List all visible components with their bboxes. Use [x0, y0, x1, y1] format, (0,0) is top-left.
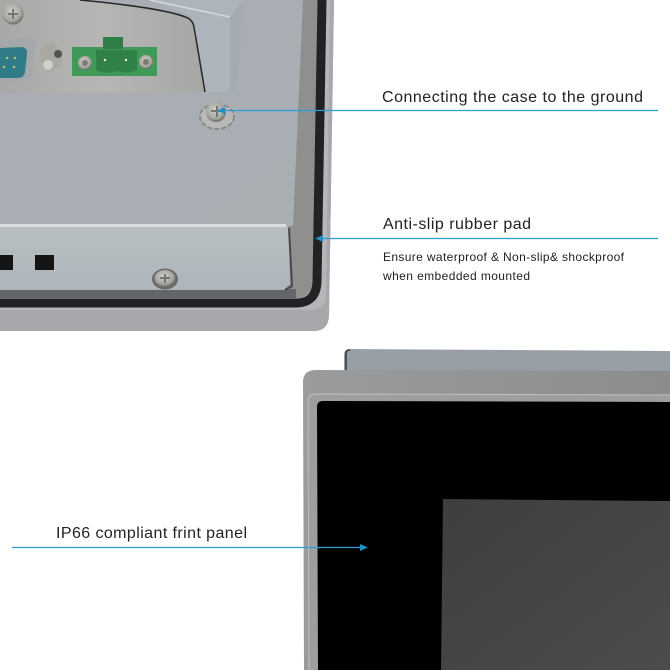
arrow: rubber pad	[315, 235, 658, 242]
callout: ground connection	[217, 89, 658, 114]
bezel inner groove	[308, 394, 670, 670]
top screw	[2, 4, 24, 24]
green terminal connector	[72, 37, 157, 76]
plate dark edge	[80, 0, 205, 92]
front bezel	[303, 370, 670, 670]
housing boss	[150, 0, 243, 92]
callout: rubber pad	[315, 216, 658, 283]
flap edge	[285, 228, 292, 290]
frame bevel	[0, 0, 334, 331]
arrow: front panel	[12, 544, 368, 551]
photo: rear case corner	[0, 0, 334, 331]
back panel	[0, 0, 303, 226]
flap highlight	[0, 224, 286, 227]
outer metal frame	[0, 0, 334, 331]
boss highlight	[150, 0, 230, 17]
rubber gasket	[0, 0, 322, 303]
description: rubber pad	[382, 250, 625, 283]
rear case strip	[344, 349, 670, 372]
label: rubber pad: Anti-slip rubber pad	[383, 216, 531, 233]
description: rubber pad: when embedded mounted	[382, 269, 530, 283]
brushed I/O plate	[0, 0, 205, 93]
label: ground connection: Connecting the case to the ground	[382, 89, 643, 106]
lower flap screw	[152, 268, 178, 290]
ground screw with star washer	[200, 102, 234, 129]
callout: front panel	[12, 525, 368, 551]
label: front panel: IP66 compliant frint panel	[56, 525, 247, 542]
photo: front panel corner	[303, 349, 670, 670]
shadow band under flap	[0, 289, 296, 298]
boss side face	[230, 0, 243, 92]
active screen area	[441, 499, 670, 670]
lower flap	[0, 225, 290, 290]
description: rubber pad: Ensure waterproof & Non-slip& shockproof	[383, 250, 625, 264]
vent slots	[0, 255, 54, 270]
strip dark edge	[346, 350, 350, 370]
inner flange	[0, 0, 320, 298]
serial port	[0, 37, 63, 81]
arrow: ground connection	[217, 107, 658, 114]
black display glass	[317, 401, 670, 670]
bezel side face	[308, 394, 670, 670]
